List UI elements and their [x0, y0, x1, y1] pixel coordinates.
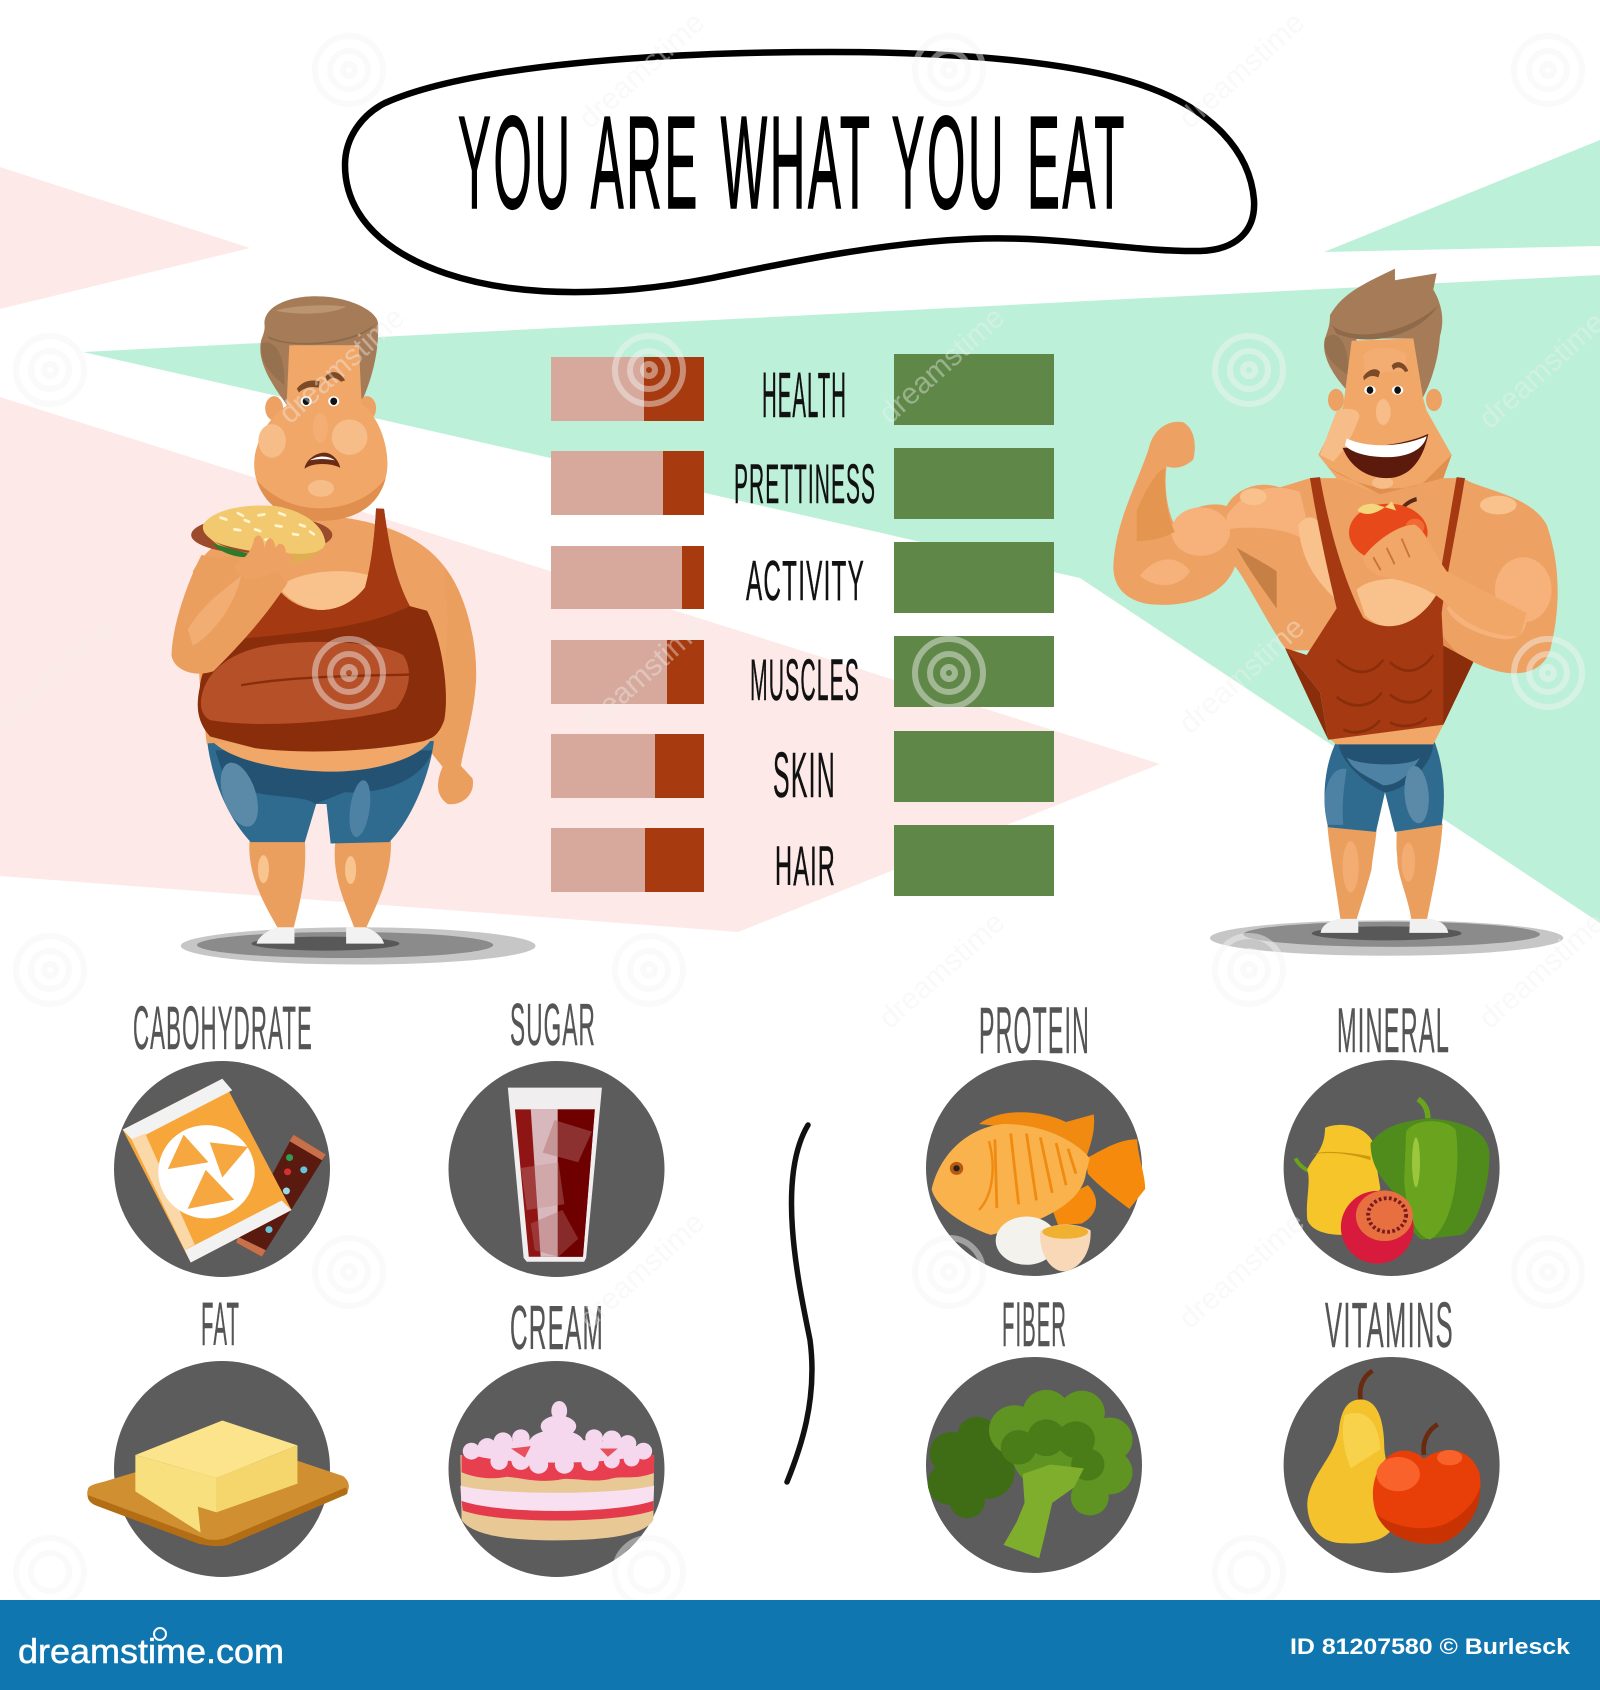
shorts	[207, 736, 434, 844]
row: activity: ACTIVITY	[746, 549, 865, 613]
hair and head	[1318, 269, 1452, 494]
watermark words: dreamstime	[573, 1206, 711, 1335]
icon circle: fat	[114, 1361, 330, 1577]
mouth	[304, 453, 340, 469]
face	[1318, 338, 1452, 494]
character: overweight man eating a burger	[172, 296, 536, 965]
icon: fish and eggs	[932, 1112, 1145, 1271]
watermark words	[0, 6, 1600, 1335]
tank top	[1285, 477, 1473, 740]
icon circle: cream	[448, 1361, 664, 1577]
title bubble	[345, 52, 1254, 292]
legs and shoes	[1321, 823, 1448, 933]
icon circle: cabohydrate	[114, 1061, 330, 1277]
icon: broccoli	[928, 1390, 1132, 1558]
hand holding burger	[234, 535, 293, 579]
icon: peppers and tomato	[1295, 1099, 1489, 1264]
icon: chips and chocolate bar	[123, 1079, 326, 1262]
apple in hand	[1349, 499, 1527, 636]
hair and head	[254, 296, 387, 521]
watermark words: dreamstime	[873, 906, 1011, 1035]
food group: unhealthy foods: CREAM	[510, 1294, 604, 1363]
belly skin	[207, 734, 434, 772]
image credit: ID 81207580 © Burlesck	[1290, 1634, 1571, 1659]
background rays	[0, 140, 1600, 932]
brows and eyes	[1363, 369, 1380, 380]
row: activity	[551, 542, 1054, 613]
row: prettiness: PRETTINESS	[734, 452, 876, 515]
watermark words: dreamstime	[573, 6, 711, 135]
food group: healthy foods: FIBER	[1002, 1290, 1067, 1360]
tank top	[198, 508, 446, 751]
far arm	[410, 553, 476, 804]
watermark words: dreamstime	[1173, 1206, 1311, 1335]
row: muscles: MUSCLES	[750, 648, 860, 713]
food group: healthy foods	[926, 993, 1500, 1573]
icon circle: protein	[926, 1060, 1142, 1276]
footer logo: dreamstime.com	[18, 1633, 284, 1671]
watermark words: dreamstime	[1173, 6, 1311, 135]
divider curve	[787, 1125, 812, 1482]
chest highlight	[279, 571, 370, 610]
food group: unhealthy foods: FAT	[201, 1290, 240, 1358]
row: health: HEALTH	[762, 359, 847, 431]
food group: unhealthy foods: SUGAR	[510, 992, 596, 1058]
food group: healthy foods: PROTEIN	[979, 993, 1090, 1067]
food drawings: left	[87, 1079, 654, 1546]
watermark words: dreamstime	[573, 611, 711, 740]
icon circle: fiber	[926, 1357, 1142, 1573]
icon circle: mineral	[1284, 1060, 1500, 1276]
row: health	[551, 354, 1054, 431]
icon circle: vitamins	[1284, 1357, 1500, 1573]
row: skin: SKIN	[773, 739, 836, 811]
icon: cream cake	[460, 1401, 654, 1540]
brows and eyes	[297, 380, 320, 392]
row: skin	[551, 731, 1054, 811]
icon circle: sugar	[448, 1061, 664, 1277]
torso skin	[193, 515, 448, 743]
face	[254, 345, 387, 521]
near arm	[172, 548, 288, 674]
row: hair: HAIR	[775, 834, 836, 897]
ears	[265, 396, 283, 420]
watermark words: dreamstime	[873, 301, 1011, 430]
character: muscular man eating an apple	[1113, 269, 1563, 956]
burger	[191, 505, 332, 563]
icon: butter on a board	[87, 1421, 349, 1546]
watermark words: dreamstime	[273, 301, 411, 430]
comparison chart	[551, 354, 1054, 897]
ground shadow	[181, 927, 536, 965]
row: hair	[551, 825, 1054, 897]
row: prettiness	[551, 448, 1054, 519]
torso and flexed arm	[1113, 422, 1558, 673]
watermark words: dreamstime	[1173, 611, 1311, 740]
food group: unhealthy foods	[87, 992, 664, 1577]
waist	[1328, 725, 1443, 744]
food drawings: right	[928, 1099, 1489, 1558]
ground shadow	[1210, 920, 1563, 956]
shorts	[1325, 739, 1444, 832]
row: muscles	[551, 636, 1054, 713]
icon: pear and apple	[1307, 1371, 1481, 1544]
icon: glass of cola	[508, 1088, 602, 1262]
legs and shoes	[249, 839, 391, 944]
smile	[1343, 434, 1428, 478]
food group: unhealthy foods: CABOHYDRATE	[133, 994, 313, 1062]
footer bar	[0, 1600, 1600, 1690]
